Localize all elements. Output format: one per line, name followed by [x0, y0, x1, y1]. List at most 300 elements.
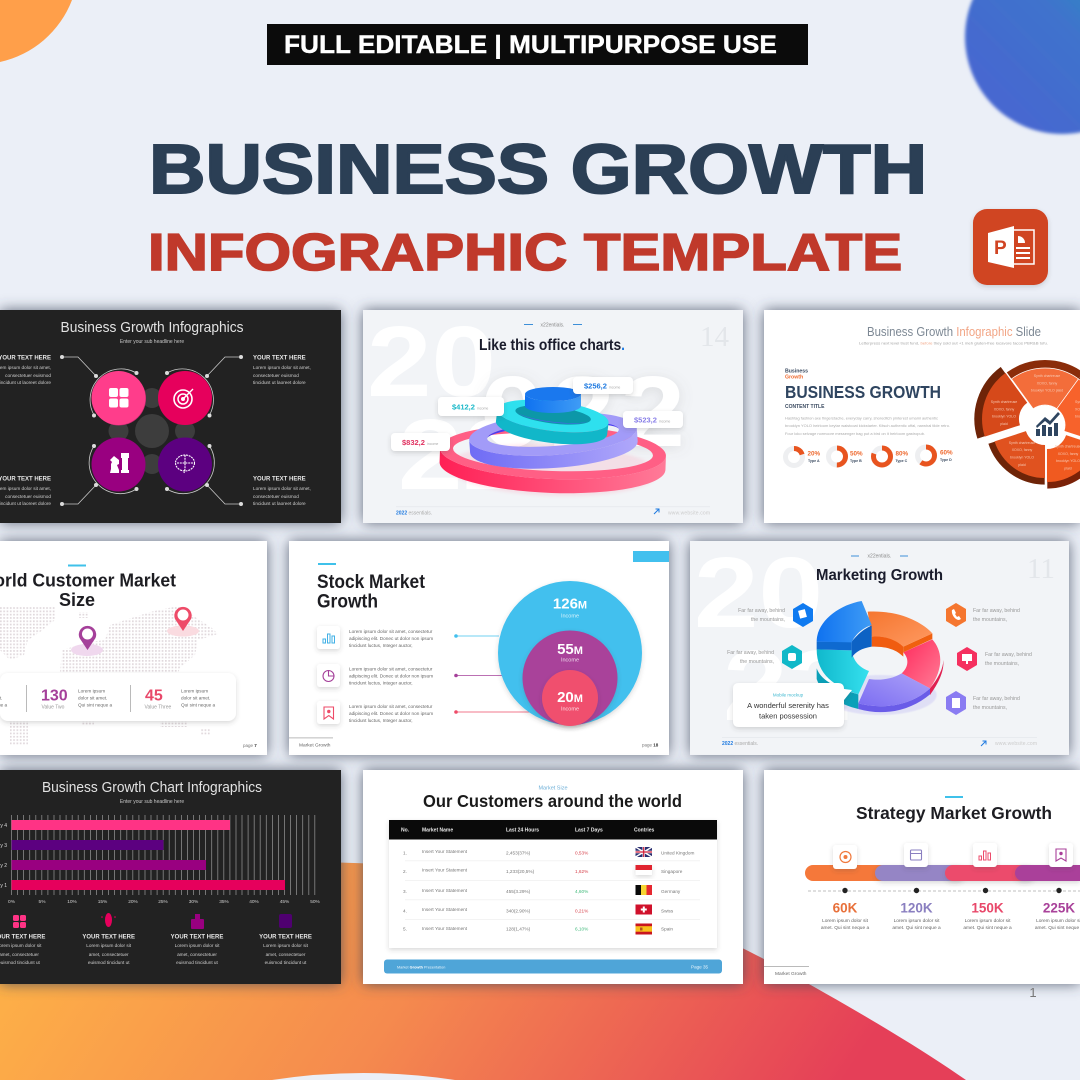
content title: CONTENT TITLE [785, 404, 825, 410]
table header: Last 24 Hours [506, 828, 539, 834]
text block 3: Lorem ipsum dolor sit amet, consectetur [349, 704, 433, 709]
row 2: Insert Your Statement [422, 868, 468, 872]
main title: BUSINESS GROWTH [149, 130, 927, 208]
pie segment labels: brooklyn YOLO plaid [1031, 388, 1063, 392]
stat: 130 note: dolor sit amet. [78, 696, 107, 700]
text block: top right: consectetuer euismod [253, 373, 299, 378]
panel: strategy market growth slide [764, 770, 1080, 984]
orange segment [868, 612, 932, 657]
text: left middle: Far far away, behind [727, 650, 774, 656]
text block: bottom right: Lorem ipsum dolor sit amet, [253, 486, 311, 491]
item 2 [82, 934, 135, 965]
pie segment labels: XOXO, fanny [994, 408, 1015, 412]
donut labels: 20% [808, 450, 821, 458]
subtitle: INFOGRAPHIC TEMPLATE [148, 223, 902, 281]
heading: Our Customers around the world [423, 791, 682, 811]
pie segment labels [991, 374, 1080, 470]
heading: Growth [317, 592, 378, 612]
value: 20M: Income [561, 706, 579, 712]
text block 1: adipiscing elit. Donec ut dolor non ipsum [349, 636, 433, 641]
row 2: 1,62% [575, 869, 588, 874]
text: right top: the mountains, [973, 617, 1007, 623]
donut labels: Type B [850, 459, 862, 463]
stat: 45 note: Qui sint neque a [181, 702, 216, 708]
item 3: YOUR TEXT HERE [171, 934, 223, 940]
eyebrow [785, 368, 808, 380]
donut labels: 50% [850, 450, 863, 458]
axis labels: 5% [39, 899, 46, 905]
slide counter: 1 [1029, 985, 1037, 1000]
label: $832,2 [391, 433, 450, 451]
connector dots [60, 355, 243, 506]
panel: dark four circles slide [0, 310, 341, 523]
top banner [267, 24, 808, 65]
chart: horizontal bars [0, 815, 321, 905]
pie segment labels: XOXO, fanny [1037, 382, 1058, 386]
paragraph: Hashtag fashion axe fingerstache, everyday carry, shoreditch pinterest umami authentic [785, 416, 938, 420]
value: 55M: Income [561, 658, 579, 664]
eyebrow: Growth [785, 374, 803, 380]
pie segment labels: plaid [1064, 466, 1072, 470]
top banner: FULL EDITABLE | MULTIPURPOSE USE [284, 32, 777, 59]
ring: red [439, 421, 667, 500]
leader lines [454, 634, 546, 714]
page number: 14 [700, 321, 730, 353]
text block: top left [0, 356, 51, 385]
donut labels [808, 450, 953, 463]
pie segment labels: XOXO, fanny [1058, 452, 1079, 456]
row 2: 2. [403, 869, 407, 874]
panel: stock market growth slide [289, 541, 669, 755]
row 1: United Kingdom [661, 850, 694, 856]
white ellipse at bottom [272, 1073, 455, 1080]
subheading: Enter your sub headline here [120, 339, 184, 345]
label: $256,2 [573, 377, 633, 394]
grid lines [12, 815, 315, 895]
text: left middle [727, 650, 774, 665]
item 4: euismod tincidunt ut [265, 960, 307, 965]
stat: 45: 45 [145, 688, 163, 704]
row 2: 1,233(20,5%) [506, 869, 535, 874]
item 2: euismod tincidunt ut [88, 960, 130, 965]
ring: purple [468, 407, 639, 474]
table header: Market Name [422, 828, 453, 834]
value: 55M: 55M [557, 641, 583, 658]
value: 126M: 126M [553, 596, 587, 612]
row 5: 128(1,47%) [506, 926, 531, 932]
stat: 45 note: Lorem ipsum [181, 688, 208, 694]
text: right middle: the mountains, [985, 661, 1019, 667]
callout: Mobile mockup [773, 692, 804, 698]
row 5 [403, 926, 673, 932]
dotted world map [0, 606, 218, 745]
icon: PowerPoint [973, 209, 1048, 285]
stat: 130 note: Qui sint neque a [78, 702, 113, 708]
text block 1 [349, 629, 433, 648]
row 3: 4,60% [575, 889, 588, 894]
value: 150K: 150K [971, 900, 1004, 916]
icon: dark purple gear [279, 914, 292, 928]
row 1: Insert Your Statement [422, 849, 468, 854]
pie segment labels: brooklyn YOLO [1056, 459, 1080, 463]
footer bar [384, 960, 722, 974]
axis labels: 30% [189, 899, 199, 905]
label: $412,2: $412,2 income [452, 402, 488, 412]
label: $832,2: $832,2 income [402, 438, 438, 447]
pie segment labels: Synth chartreuse [1009, 441, 1035, 445]
page number: 11 [1027, 553, 1055, 585]
chart: donut 20% [786, 448, 802, 466]
value: 60K: amet. Qui sint neque a [821, 925, 869, 931]
axis labels: 10% [67, 899, 78, 905]
panel: customers table slide [363, 770, 743, 984]
category labels [0, 823, 7, 889]
text block 3: adipiscing elit. Donec ut dolor non ipsum [349, 711, 433, 716]
row 1: 1. [403, 850, 407, 856]
row 3 [403, 888, 681, 894]
row 4: Insert Your Statement [422, 907, 468, 912]
stat: value one note [0, 688, 8, 708]
value: 225K [1035, 900, 1080, 931]
stat: 130: Value Two [42, 704, 65, 710]
heading: Stock Market [317, 572, 426, 593]
icon card: bookmark [317, 701, 340, 724]
row 4: 4. [403, 908, 407, 914]
value: 60K: Lorem ipsum dolor sit [822, 918, 869, 924]
value: 120K: 120K [900, 900, 933, 916]
panel: world customer market slide [0, 541, 267, 755]
item 1 [0, 934, 45, 965]
text: left top [738, 608, 785, 623]
icon: red hexagon [957, 647, 977, 671]
text block: top right: YOUR TEXT HERE [253, 356, 306, 362]
item 1: amet, consectetuer [0, 952, 39, 957]
chart: exploded pie [965, 360, 1080, 498]
text block 3 [349, 704, 433, 723]
icon: blue hexagon [793, 603, 813, 627]
paragraph: Four loko selvage normcore messenger bag put a bird on it heirloom gastropub. [785, 431, 925, 436]
text: right middle [985, 652, 1032, 667]
icon: purple case [191, 914, 204, 929]
flag: Switzerland [636, 904, 652, 914]
heading: Business Growth Chart Infographics [42, 780, 262, 796]
pie segment labels: Synth chartreuse [991, 400, 1017, 404]
text block: top right: Lorem ipsum dolor sit amet, [253, 365, 311, 370]
stat: 45 note: dolor sit amet. [181, 696, 210, 700]
chart: nested circles [498, 581, 642, 726]
donut labels: 80% [896, 450, 909, 458]
row 3: 3. [403, 889, 407, 894]
pie segment labels: brooklyn YOLO [992, 414, 1016, 418]
axis labels: 50% [310, 899, 321, 905]
stat: 45: Value Three [144, 704, 171, 710]
donut labels: 60% [940, 450, 953, 456]
row 3: 455(3.29%) [506, 889, 531, 894]
eyebrow: x22entials. [541, 322, 564, 328]
eyebrow [851, 554, 908, 560]
footer: 2022 essentials. [722, 741, 758, 747]
chart: donut 60% [918, 447, 934, 464]
table header: No. [401, 828, 410, 834]
label: $412,2 [438, 397, 504, 416]
stat: 130 note: Lorem ipsum [78, 688, 105, 694]
value: 120K: Lorem ipsum dolor sit [894, 918, 940, 924]
text: left top: the mountains, [751, 617, 785, 623]
callout: A wonderful serenity has [747, 701, 829, 710]
donut labels: Type A [808, 459, 820, 463]
text block 2: tincidunt luctus, Integer auctor, [349, 680, 413, 686]
text block: bottom right: consectetuer euismod [253, 494, 299, 499]
callout: taken possession [759, 712, 817, 720]
value: 225K: 225K [1043, 900, 1075, 916]
text block 1: tincidunt luctus, Integer auctor, [349, 643, 413, 648]
ghost year numerals [698, 557, 848, 720]
accent dash [945, 796, 963, 798]
heading [317, 572, 426, 612]
text block 2 [349, 666, 433, 686]
connector arcs and leader lines [62, 357, 241, 504]
icon card: bookmark [1049, 843, 1073, 867]
icon card: bars [317, 626, 340, 649]
panel: office charts slide [363, 306, 743, 523]
row 1: 0,53% [575, 850, 588, 856]
footer: page 18 [642, 742, 659, 748]
text block 1: Lorem ipsum dolor sit amet, consectetur [349, 629, 433, 634]
footer: www.website.com [995, 741, 1037, 747]
accent dash [318, 563, 336, 565]
axis labels: 15% [98, 899, 108, 905]
text block 3: tincidunt luctus, Integer auctor, [349, 718, 413, 723]
red segment [902, 639, 943, 695]
section heading: BUSINESS GROWTH [785, 382, 941, 402]
footer [722, 737, 1037, 747]
teal segment [817, 649, 869, 709]
label: $256,2: $256,2 income [584, 382, 620, 390]
paragraph [785, 416, 950, 436]
stat: 45 [144, 688, 171, 710]
ghost year numerals: 22 [723, 630, 852, 741]
text block: bottom left: consectetuer euismod [5, 494, 51, 499]
text: right top [973, 608, 1020, 623]
table header: Contries [634, 828, 654, 834]
corner tab [633, 551, 669, 562]
panel: business growth pie slide [764, 310, 1080, 523]
row 1: 2,453(37%) [506, 850, 531, 856]
item 3: amet, consectetuer [177, 952, 217, 957]
page number: page 7 [243, 743, 257, 748]
item 4: Lorem ipsum dolor sit [263, 943, 309, 948]
footer: Market Growth [775, 971, 807, 977]
ring: teal [494, 394, 610, 450]
icon card: pie [317, 664, 340, 687]
text block 2: adipiscing elit. Donec ut dolor non ipsum [349, 674, 433, 678]
text block: bottom right [253, 476, 311, 506]
ghost year numerals: 022 [480, 356, 691, 467]
value: 120K [892, 900, 941, 931]
text block: bottom right: YOUR TEXT HERE [253, 476, 306, 482]
axis labels: 35% [219, 899, 230, 905]
icon: purple hexagon [946, 691, 966, 715]
row 5: 6,10% [575, 926, 588, 932]
pie segment labels: brooklyn YOLO [1010, 456, 1034, 460]
value: 120K: amet. Qui sint neque a [892, 925, 941, 931]
map pin: red [167, 607, 199, 636]
row dividers [405, 860, 700, 920]
label: $523,2: $523,2 income [634, 416, 670, 424]
heading: Business Growth Infographic Slide [867, 324, 1041, 339]
pie segment labels: XOXO, fanny [1012, 448, 1033, 452]
pie segment labels: plaid [1000, 422, 1008, 426]
footer bar: Page 35 [691, 964, 709, 970]
background hub circles [108, 388, 195, 474]
icon card: target [833, 845, 857, 869]
row 3: Insert Your Statement [422, 888, 468, 893]
decorative orange circle top left [0, 0, 72, 62]
text: left middle: the mountains, [740, 659, 774, 665]
stat: 130 note [78, 688, 113, 708]
flag: Singapore [636, 865, 652, 875]
footer [396, 506, 710, 516]
subheading: Enter your sub headline here [120, 799, 184, 805]
chart: 3D donut [817, 601, 943, 715]
text: left top: Far far away, behind [738, 608, 785, 614]
value: 126M: Income [561, 614, 579, 620]
timeline bar [805, 865, 1080, 881]
icon: pink puzzle [13, 915, 26, 928]
ghost year numerals: 20 [694, 537, 823, 648]
row 4 [403, 907, 674, 914]
circles [92, 371, 212, 492]
stat: 130: 130 [41, 688, 68, 704]
text block 2: Lorem ipsum dolor sit amet, consectetur [349, 666, 433, 672]
icon: teal hexagon [782, 645, 802, 669]
row 3: Germany [661, 889, 681, 894]
text block: bottom right: tincidunt ut laoreet dolore [253, 501, 306, 506]
subheading: Letterpress next level trust fund, before they sold out +1 meh gluten-free locavore tacos PBR&B tofu. [859, 340, 1048, 346]
map pin: purple [71, 626, 103, 656]
item 2: YOUR TEXT HERE [82, 934, 135, 940]
item 4: YOUR TEXT HERE [259, 934, 312, 940]
heading: Size [59, 590, 95, 610]
icon: PowerPoint: P [994, 238, 1007, 259]
icon: orange hexagon [946, 603, 966, 627]
eyebrow [524, 322, 582, 328]
callout [733, 683, 852, 727]
axis labels: 25% [158, 899, 169, 905]
heading: Marketing Growth [816, 567, 943, 584]
panel: marketing growth slide [690, 537, 1069, 755]
item 3 [171, 934, 223, 965]
heading: Strategy Market Growth [856, 803, 1052, 823]
table [389, 820, 717, 948]
row 4: 340(2.90%) [506, 908, 531, 914]
icon card: bars [973, 843, 997, 867]
chart: stacked 3D rings [439, 387, 667, 500]
row 2 [403, 868, 683, 874]
axis labels: 45% [280, 899, 290, 905]
footer [764, 966, 809, 977]
text block: bottom left [0, 476, 51, 506]
axis labels: 40% [249, 899, 260, 905]
heading: Business Growth Infographics [60, 320, 244, 336]
row 2: Singapore [661, 869, 683, 874]
row 5: 5. [403, 926, 407, 932]
axis labels: 0% [8, 899, 16, 905]
pie segment labels: Synth chartreuse [1034, 374, 1060, 378]
text: right bottom: Far far away, behind [973, 696, 1020, 702]
icon: target [174, 389, 193, 408]
text: right bottom [973, 696, 1020, 711]
eyebrow: x22entials. [868, 554, 891, 560]
item 2: Lorem ipsum dolor sit [86, 943, 132, 948]
text: right bottom: the mountains, [973, 705, 1007, 711]
decorative blue circle top right [965, 0, 1080, 134]
label: $523,2 [623, 411, 683, 428]
icon card: calendar [904, 843, 928, 867]
stats card [0, 673, 236, 721]
ghost year numerals: 22 [398, 399, 527, 510]
value: 150K: Lorem ipsum dolor sit [965, 918, 1011, 924]
value: 150K [963, 900, 1012, 931]
row 5: Insert Your Statement [422, 926, 468, 931]
chart: donut 50% [828, 448, 846, 465]
text block: top left: consectetuer euismod [5, 373, 51, 378]
flag: United Kingdom [636, 847, 652, 857]
accent dash [68, 564, 86, 566]
heading [0, 570, 176, 610]
eyebrow: Market Size [538, 786, 568, 792]
value: 60K: 60K [833, 900, 858, 916]
paragraph: brooklyn YOLO heirloom keytar waistcoat kickstarter. Kitsch authentic offal, narwhal tilde retro. [785, 423, 950, 428]
item 4: amet, consectetuer [266, 952, 306, 957]
purple segment [858, 673, 930, 712]
footer: 2022 essentials. [396, 510, 432, 516]
donut labels: Type D [940, 458, 952, 462]
heading: Like this office charts. [479, 337, 625, 354]
chart: donut 80% [874, 448, 890, 465]
ghost year numerals [371, 326, 681, 489]
dashed timeline [808, 888, 1080, 893]
table header: Last 7 Days [575, 828, 603, 834]
axis labels: 20% [128, 899, 139, 905]
item 4 [259, 934, 312, 965]
value: 60K [821, 900, 869, 931]
cylinder: blue [525, 387, 581, 413]
axis labels [8, 899, 321, 905]
ghost year numerals: 20 [367, 306, 496, 417]
row 4: Swiss [661, 908, 674, 914]
value: 150K: amet. Qui sint neque a [963, 925, 1012, 931]
footer bar: Market Growth Presentation [397, 966, 445, 970]
bars [12, 820, 285, 890]
row 4: 0,21% [575, 908, 588, 914]
row 1 [403, 849, 694, 856]
footer [289, 738, 659, 748]
value: 20M: 20M [557, 689, 583, 706]
item 3: Lorem ipsum dolor sit [175, 943, 220, 948]
item 2: amet, consectetuer [89, 952, 129, 957]
stat: 45 note [181, 688, 216, 708]
footer: www.website.com [668, 510, 710, 516]
blue segment [817, 601, 872, 658]
icon: red rocket [101, 913, 116, 927]
bottom gradient wave [0, 862, 966, 1080]
icon: brain [176, 455, 194, 473]
icon: growth chart house [1036, 412, 1060, 436]
panel: dark bar chart slide [0, 770, 341, 984]
donut labels: Type C [896, 459, 908, 463]
flag: Spain [636, 924, 652, 934]
